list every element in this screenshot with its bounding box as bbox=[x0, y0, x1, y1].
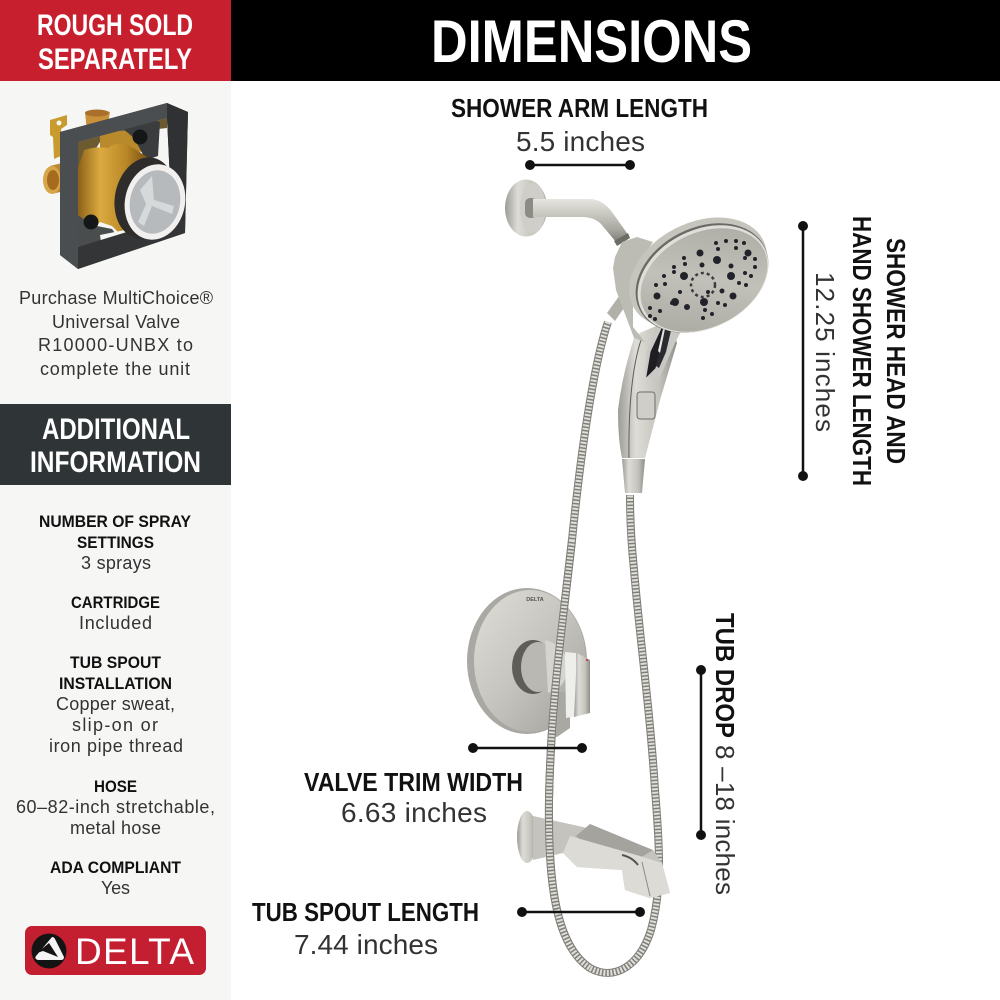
text: hose: HOSE bbox=[94, 777, 137, 796]
text: cartridge: Included bbox=[79, 613, 152, 633]
shower arm and flange bbox=[505, 180, 630, 246]
text: number of spray settings: NUMBER OF SPRAY bbox=[39, 512, 192, 531]
dimension: shower head and hand shower length: 12.25 inches bbox=[810, 272, 840, 432]
text: valve purchase note: Universal Valve bbox=[52, 312, 180, 332]
dimension: shower arm length bbox=[451, 93, 708, 170]
text: valve purchase note: Purchase MultiChoice® bbox=[19, 288, 213, 308]
text: valve purchase note bbox=[19, 288, 213, 379]
hand shower handle bbox=[607, 237, 687, 493]
dimension: shower head and hand shower length: SHOWER HEAD AND bbox=[881, 238, 911, 464]
panel: rough sold separately header bbox=[0, 0, 231, 81]
text: tub spout installation: TUB SPOUT bbox=[70, 653, 162, 672]
panel: left sidebar background bbox=[0, 0, 231, 1000]
dimension: tub drop: 8 –18 inches bbox=[710, 745, 740, 895]
dimension: shower head and hand shower length: HAND SHOWER LENGTH bbox=[847, 216, 877, 486]
panel: rough sold separately header: SEPARATELY bbox=[38, 43, 192, 76]
tub spout bbox=[517, 811, 670, 898]
text: hose: metal hose bbox=[70, 818, 161, 838]
text: tub spout installation: slip-on or bbox=[72, 715, 158, 735]
text: valve purchase note: R10000-UNBX to bbox=[38, 335, 193, 355]
dimension: valve trim width: VALVE TRIM WIDTH bbox=[304, 767, 523, 797]
heading: additional information: INFORMATION bbox=[30, 446, 201, 479]
dimension: valve trim width: 6.63 inches bbox=[341, 797, 487, 828]
text: tub spout installation bbox=[49, 653, 183, 756]
icon: rough-in valve bbox=[43, 103, 192, 269]
dimension: tub spout length: 7.44 inches bbox=[294, 929, 438, 960]
text: tub spout installation: Copper sweat, bbox=[56, 694, 175, 714]
icon: delta logo: DELTA bbox=[75, 931, 194, 972]
dimension: tub drop: TUB DROP bbox=[710, 613, 740, 738]
text: cartridge bbox=[71, 593, 160, 633]
text: number of spray settings: SETTINGS bbox=[77, 533, 154, 552]
text: number of spray settings bbox=[39, 512, 192, 573]
valve trim: DELTA bbox=[526, 597, 544, 603]
dimension: shower arm length: 5.5 inches bbox=[516, 126, 645, 157]
dimension: tub spout length bbox=[252, 897, 645, 960]
icon: delta logo bbox=[25, 926, 206, 975]
hose: front section bbox=[549, 540, 590, 968]
text: ada compliant: ADA COMPLIANT bbox=[50, 858, 182, 877]
dimension: shower head and hand shower length bbox=[798, 216, 911, 486]
hose bbox=[549, 322, 659, 973]
dimension: tub spout length: TUB SPOUT LENGTH bbox=[252, 897, 479, 927]
text: hose bbox=[16, 777, 215, 838]
heading: additional information: ADDITIONAL bbox=[42, 413, 190, 446]
text: ada compliant bbox=[50, 858, 182, 898]
text: valve purchase note: complete the unit bbox=[40, 359, 190, 379]
dimension: tub drop bbox=[696, 613, 740, 895]
text: cartridge: CARTRIDGE bbox=[71, 593, 160, 612]
shower head bbox=[610, 195, 787, 354]
text: ada compliant: Yes bbox=[101, 878, 130, 898]
text: hose: 60–82-inch stretchable, bbox=[16, 797, 215, 817]
dimension: shower arm length: SHOWER ARM LENGTH bbox=[451, 93, 708, 123]
text: number of spray settings: 3 sprays bbox=[81, 553, 151, 573]
title: dimensions banner bbox=[231, 0, 1000, 81]
dimension: valve trim width bbox=[304, 743, 587, 828]
panel: rough sold separately header: ROUGH SOLD bbox=[37, 9, 193, 42]
text: tub spout installation: INSTALLATION bbox=[59, 674, 172, 693]
valve trim bbox=[467, 588, 590, 737]
text: tub spout installation: iron pipe thread bbox=[49, 736, 183, 756]
heading: additional information bbox=[0, 404, 231, 485]
title: dimensions banner: DIMENSIONS bbox=[431, 8, 752, 75]
